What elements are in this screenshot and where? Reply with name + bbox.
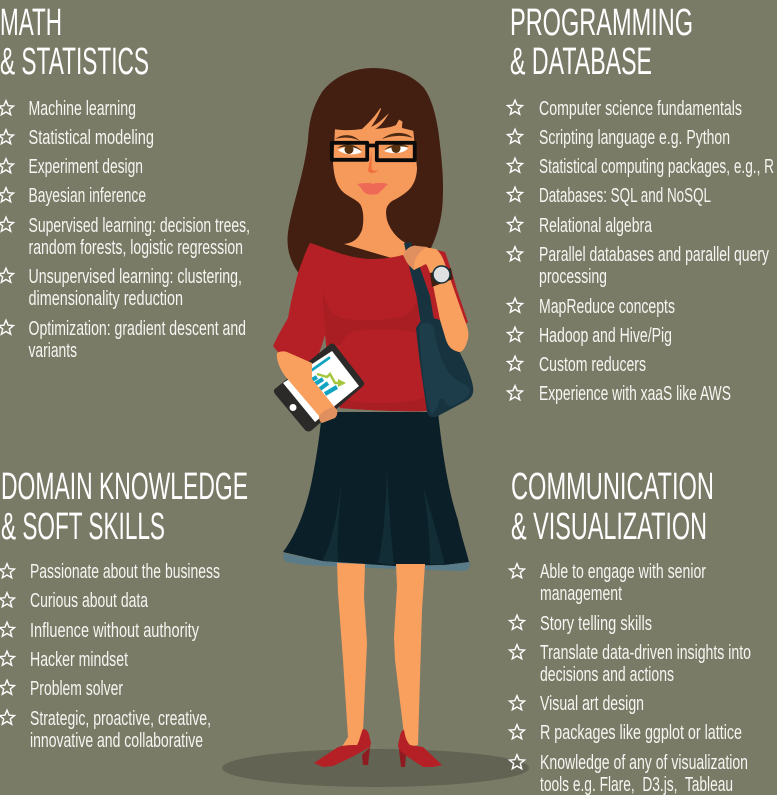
fringe: [333, 85, 420, 131]
heading: domain knowledge and soft skills: & SOFT SKILLS: [1, 506, 165, 548]
eyes: [337, 144, 409, 154]
list: domain skills: Problem solver: [30, 678, 123, 700]
list: programming skills: processing: [539, 266, 607, 288]
list: programming skills: Custom reducers: [539, 354, 646, 376]
list: communication skills: Able to engage with senior: [540, 561, 706, 583]
heading: communication and visualization: [511, 466, 714, 548]
list: domain skills: Influence without authority: [30, 620, 199, 642]
skirt hem: [283, 553, 470, 571]
list: domain skills: [0, 561, 220, 752]
heading: domain knowledge and soft skills: DOMAIN KNOWLEDGE: [1, 466, 248, 508]
list: math skills: variants: [28, 340, 77, 362]
list: math skills: Machine learning: [28, 98, 136, 120]
list: math skills: Optimization: gradient descent and: [28, 318, 246, 340]
list: programming skills: Relational algebra: [539, 215, 653, 237]
list: math skills: [0, 98, 250, 362]
list: programming skills: MapReduce concepts: [539, 296, 675, 318]
tablet chart: [312, 358, 346, 394]
shoes: [314, 729, 442, 767]
hair: [288, 68, 443, 280]
list: programming skills: [508, 98, 774, 405]
heading: math and statistics: & STATISTICS: [0, 41, 149, 83]
list: math skills: Supervised learning: decision trees,: [28, 215, 250, 237]
bag body: [416, 318, 473, 417]
list: domain skills: Hacker mindset: [30, 649, 128, 671]
list: math skills: Statistical modeling: [28, 127, 154, 149]
ground shadow: [222, 749, 529, 787]
heading: domain knowledge and soft skills: [1, 466, 248, 548]
panel: communication and visualization: [510, 466, 751, 795]
list: math skills: random forests, logistic regression: [28, 237, 243, 259]
figure: woman with tablet and bag: [273, 68, 473, 767]
bag strap: [404, 242, 435, 326]
list: communication skills: Visual art design: [540, 693, 644, 715]
list: communication skills: management: [540, 583, 622, 605]
nose: [368, 150, 379, 173]
tablet: [274, 344, 364, 432]
blouse: [273, 243, 468, 411]
heading: math and statistics: MATH: [0, 2, 62, 44]
list: communication skills: Story telling skills: [540, 613, 652, 635]
glasses: [332, 143, 415, 160]
left cuff of wrist: [319, 407, 337, 423]
heading: math and statistics: [0, 2, 149, 83]
blouse shading: [323, 287, 427, 411]
skirt pleats: [322, 465, 445, 565]
eyebrows: [335, 133, 413, 141]
list: math skills: dimensionality reduction: [28, 288, 183, 310]
watch: [430, 266, 453, 287]
lips: [357, 183, 388, 195]
heading: programming and database: [510, 2, 693, 83]
list: communication skills: decisions and actions: [540, 664, 674, 686]
list: communication skills: [510, 561, 751, 795]
list: programming skills: Hadoop and Hive/Pig: [539, 325, 672, 347]
panel: math and statistics: [0, 2, 250, 362]
legs: [337, 563, 425, 750]
hand shading: [404, 246, 428, 270]
handbag: [404, 242, 473, 417]
panel: domain knowledge and soft skills: [0, 466, 248, 752]
list: math skills: Unsupervised learning: clustering,: [28, 266, 242, 288]
list: math skills: Experiment design: [28, 156, 143, 178]
heading: programming and database: & DATABASE: [510, 41, 652, 83]
list: math skills: Bayesian inference: [28, 185, 146, 207]
neck and face: [333, 108, 417, 262]
list: domain skills: Curious about data: [30, 590, 149, 612]
list: domain skills: Strategic, proactive, creative,: [30, 708, 211, 730]
left forearm: [277, 351, 337, 423]
right forearm and hand: [405, 246, 468, 352]
list: domain skills: Passionate about the business: [30, 561, 220, 583]
skirt: [283, 412, 469, 566]
bag front panel: [419, 323, 470, 415]
list: domain skills: innovative and collaborative: [30, 730, 203, 752]
panel: programming and database: [508, 2, 774, 405]
